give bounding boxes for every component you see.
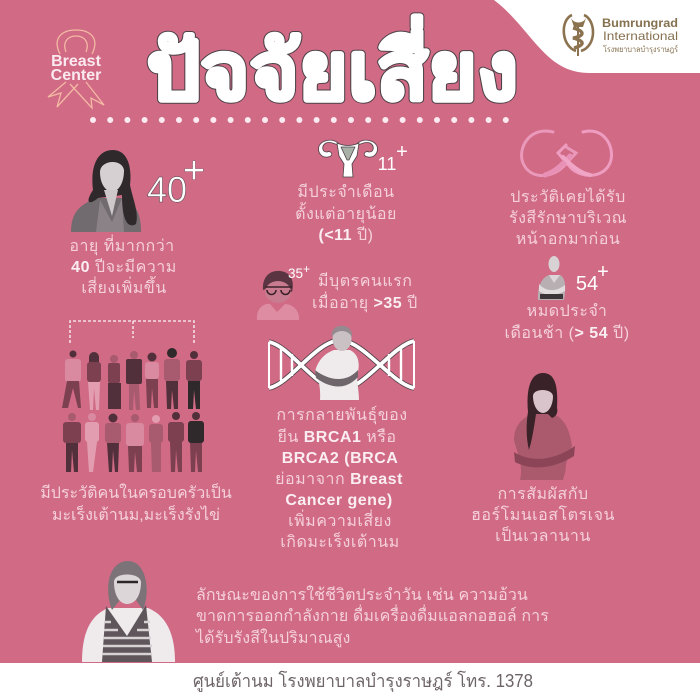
panel: BRCA mutation [269, 326, 414, 551]
text: menopause description: หมดประจำ [527, 303, 607, 320]
text: first child description: มีบุตรคนแรก [318, 272, 412, 291]
text: early menstruation description: มีประจำเดือน [297, 183, 395, 201]
text: first child description: เมื่ออายุ >35 ปี [312, 295, 418, 312]
icon: woman portrait [71, 150, 141, 232]
logo text: International [603, 29, 678, 43]
icon: Bumrungrad emblem [564, 15, 593, 56]
icon: woman with glasses [82, 561, 175, 662]
family tree connector [70, 321, 194, 343]
panel: first child after 35 [257, 262, 418, 320]
group of people: bottom row [63, 412, 204, 472]
text: lifestyle description: ลักษณะของการใช้ชีวิตประจำวัน เช่น ความอ้วน [196, 585, 528, 604]
icon: older woman [538, 256, 565, 300]
panel: prior chest radiation [509, 131, 627, 248]
logo text [602, 18, 679, 54]
text: family history description: มีประวัติคนในครอบครัวเป็น [40, 482, 232, 502]
text: estrogen description: เป็นเวลานาน [495, 525, 591, 545]
text: radiation description: หน้าอกมาก่อน [516, 230, 620, 248]
icon: Breast Center ribbon logo: Center [51, 67, 101, 84]
footer [0, 663, 700, 700]
text: age description: 40 ปีจะมีความ [71, 259, 177, 276]
panel: late menopause [504, 256, 630, 342]
number 54+: 54 [576, 273, 598, 295]
number 54+ [576, 261, 609, 295]
panel: early menstruation [295, 140, 408, 244]
icon: older woman with crossed arms [315, 326, 359, 400]
icon: young woman [514, 373, 575, 480]
text: family history description: มะเร็งเต้านม,มะเร็งรังไข่ [52, 504, 220, 524]
panel: estrogen exposure [471, 373, 615, 545]
text: age description: เสี่ยงเพิ่มขึ้น [81, 276, 167, 297]
age label 40+: + [183, 150, 205, 192]
text: BRCA description: เกิดมะเร็งเต้านม [280, 531, 400, 551]
number 11+: 11 [378, 154, 396, 174]
title: ปัจจัยเสี่ยง [147, 15, 518, 116]
logo text: โรงพยาบาลบำรุงราษฎร์ [603, 44, 679, 54]
title: ปัจจัยเสี่ยง [147, 15, 518, 116]
text: estrogen description: การสัมผัสกับ [497, 486, 589, 503]
text: menopause description: เดือนช้า (> 54 ปี) [504, 325, 630, 342]
number 35+: + [303, 262, 310, 276]
group of people: top row [62, 348, 202, 410]
text: estrogen description: ฮอร์โมนเอสโตรเจน [471, 505, 615, 524]
dotted divider [93, 117, 510, 123]
text: BRCA description: เพิ่มความเสี่ยง [288, 509, 392, 530]
icon: uterus [319, 140, 377, 177]
text: BRCA description: ยีน BRCA1 หรือ [277, 429, 397, 446]
age label 40+ [147, 150, 205, 210]
panel: family history [40, 321, 232, 524]
text: lifestyle description: ขาดการออกกำลังกาย ดื่มเครื่องดื่มแอลกอฮอล์ การ [196, 604, 549, 625]
panel: age over 40 [69, 150, 205, 297]
text: radiation description: ประวัติเคยได้รับ [510, 187, 626, 206]
text: age description: อายุ ที่มากกว่า [69, 234, 175, 256]
number 11+ [378, 141, 408, 174]
footer: ศูนย์เต้านม โรงพยาบาลบำรุงราษฎร์ โทร. 1378 [193, 670, 533, 692]
text: early menstruation description: ตั้งแต่อายุน้อย [295, 202, 397, 224]
panel: lifestyle [82, 561, 549, 662]
number 35+: 35 [288, 266, 303, 281]
age label 40+: 40 [147, 169, 187, 210]
logo text: Bumrungrad [602, 18, 678, 30]
icon: girl with glasses [257, 271, 299, 320]
number 54+: + [597, 261, 609, 283]
text: BRCA description: การกลายพันธุ์ของ [276, 405, 408, 425]
text: radiation description: รังสีรักษาบริเวณ [509, 209, 627, 227]
text: early menstruation description: (<11 ปี) [318, 227, 374, 244]
icon: DNA helix [269, 340, 414, 391]
text: BRCA description: Cancer gene) [285, 492, 393, 509]
text: lifestyle description: ได้รับรังสีในปริมาณสูง [194, 628, 350, 648]
icon: Breast Center ribbon logo: Breast [51, 53, 102, 70]
text: BRCA description: ย่อมาจาก Breast [275, 471, 403, 488]
icon: Breast Center ribbon logo [48, 30, 104, 108]
number 11+: + [396, 141, 408, 163]
text: BRCA description: BRCA2 (BRCA [282, 450, 398, 467]
icon: pink ribbon loop [522, 131, 612, 176]
panel: hospital logo corner [494, 0, 700, 73]
